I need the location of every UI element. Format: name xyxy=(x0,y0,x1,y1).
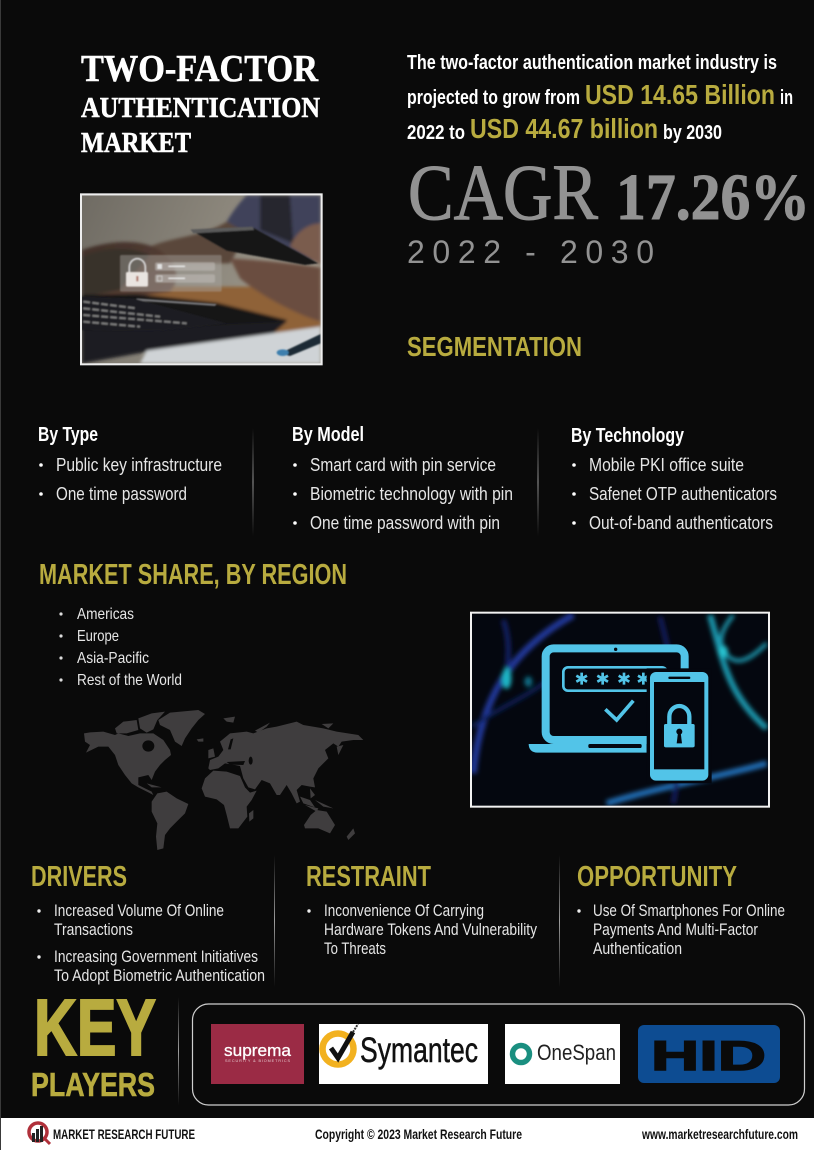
copyright: Copyright © 2023 Market Research Future xyxy=(315,1126,522,1142)
heading: segmentation: SEGMENTATION xyxy=(407,331,582,362)
title: AUTHENTICATION xyxy=(81,92,320,124)
world map xyxy=(84,710,363,850)
footer logo: MARKET RESEARCH FUTURE xyxy=(53,1126,195,1142)
column: opportunity: Authentication xyxy=(593,940,682,958)
column: drivers: DRIVERS xyxy=(31,861,127,893)
photo: hands using laptop and phone xyxy=(80,193,323,365)
logo: hid xyxy=(638,1025,780,1083)
segment: by model: Smart card with pin service xyxy=(310,455,496,475)
picture: password on laptop and phone xyxy=(470,612,770,808)
title: MARKET xyxy=(81,127,191,159)
login overlay xyxy=(120,255,222,292)
segment: by technology: Mobile PKI office suite xyxy=(589,455,744,475)
column: opportunity: Payments And Multi-Factor xyxy=(593,921,758,939)
region list: Asia-Pacific xyxy=(77,650,149,667)
market size summary text: projected to grow from xyxy=(407,87,580,109)
CAGR figure: 2022 - 2030 xyxy=(407,234,654,270)
segment: by technology: Out-of-band authenticators xyxy=(589,513,773,533)
column: drivers xyxy=(31,861,265,985)
region list: Europe xyxy=(77,628,119,645)
logo: suprema: SECURITY & BIOMETRICS xyxy=(225,1059,290,1063)
title xyxy=(81,48,320,159)
logo: symantec xyxy=(319,1024,488,1084)
column: drivers: Increasing Government Initiatives xyxy=(54,948,258,966)
segment: by model: One time password with pin xyxy=(310,513,500,533)
logo: suprema xyxy=(211,1024,304,1084)
CAGR figure: CAGR xyxy=(408,150,598,237)
column: opportunity: OPPORTUNITY xyxy=(577,861,737,893)
segment: by technology xyxy=(571,425,777,533)
column: restraint: RESTRAINT xyxy=(306,861,431,893)
segment: by model xyxy=(292,424,513,533)
column: restraint: Inconvenience Of Carrying xyxy=(324,902,484,920)
column: drivers: To Adopt Biometric Authentication xyxy=(54,967,265,985)
market size summary text xyxy=(407,52,793,144)
heading: key players: PLAYERS xyxy=(31,1066,155,1103)
column: restraint: Hardware Tokens And Vulnerability xyxy=(324,921,538,939)
column: drivers: Transactions xyxy=(54,921,133,939)
segment: by type: Public key infrastructure xyxy=(56,455,222,475)
segment: by model: Biometric technology with pin xyxy=(310,484,513,504)
CAGR figure xyxy=(407,150,810,270)
market size summary text: by 2030 xyxy=(663,122,722,144)
logo: onespan: OneSpan xyxy=(537,1040,616,1065)
segment: by technology: Safenet OTP authenticators xyxy=(589,484,777,504)
segment: by model: By Model xyxy=(292,424,364,446)
title: TWO-FACTOR xyxy=(81,48,318,90)
segment: by technology: By Technology xyxy=(571,425,685,447)
heading: market share by region: MARKET SHARE, BY REGION xyxy=(39,559,347,591)
icon: laptop with password xyxy=(529,648,685,753)
region list: Rest of the World xyxy=(77,672,182,689)
column: drivers: Increased Volume Of Online xyxy=(54,902,224,920)
logo: onespan xyxy=(505,1024,620,1084)
market size summary text: USD 14.65 Billion xyxy=(585,79,775,110)
region list xyxy=(59,606,182,689)
market size summary text: in xyxy=(780,87,793,109)
segment: by type: By Type xyxy=(38,424,98,446)
heading: key players xyxy=(31,983,156,1103)
column: restraint xyxy=(306,861,538,958)
footer logo xyxy=(29,1123,195,1144)
column: restraint: To Threats xyxy=(324,940,386,958)
segment: by type xyxy=(38,424,222,504)
column: opportunity xyxy=(577,861,785,958)
icon: phone with padlock xyxy=(647,668,712,783)
region list: Americas xyxy=(77,606,134,623)
heading: key players: KEY xyxy=(34,983,156,1072)
market size summary text: 2022 to xyxy=(407,122,465,144)
logo: symantec: Symantec xyxy=(360,1031,478,1070)
logo: hid: HID xyxy=(651,1032,766,1079)
key players panel xyxy=(192,1004,804,1105)
footer xyxy=(1,1118,814,1150)
logo: suprema: suprema xyxy=(224,1041,292,1060)
market size summary text: USD 44.67 billion xyxy=(470,113,658,144)
segment: by type: One time password xyxy=(56,484,187,504)
